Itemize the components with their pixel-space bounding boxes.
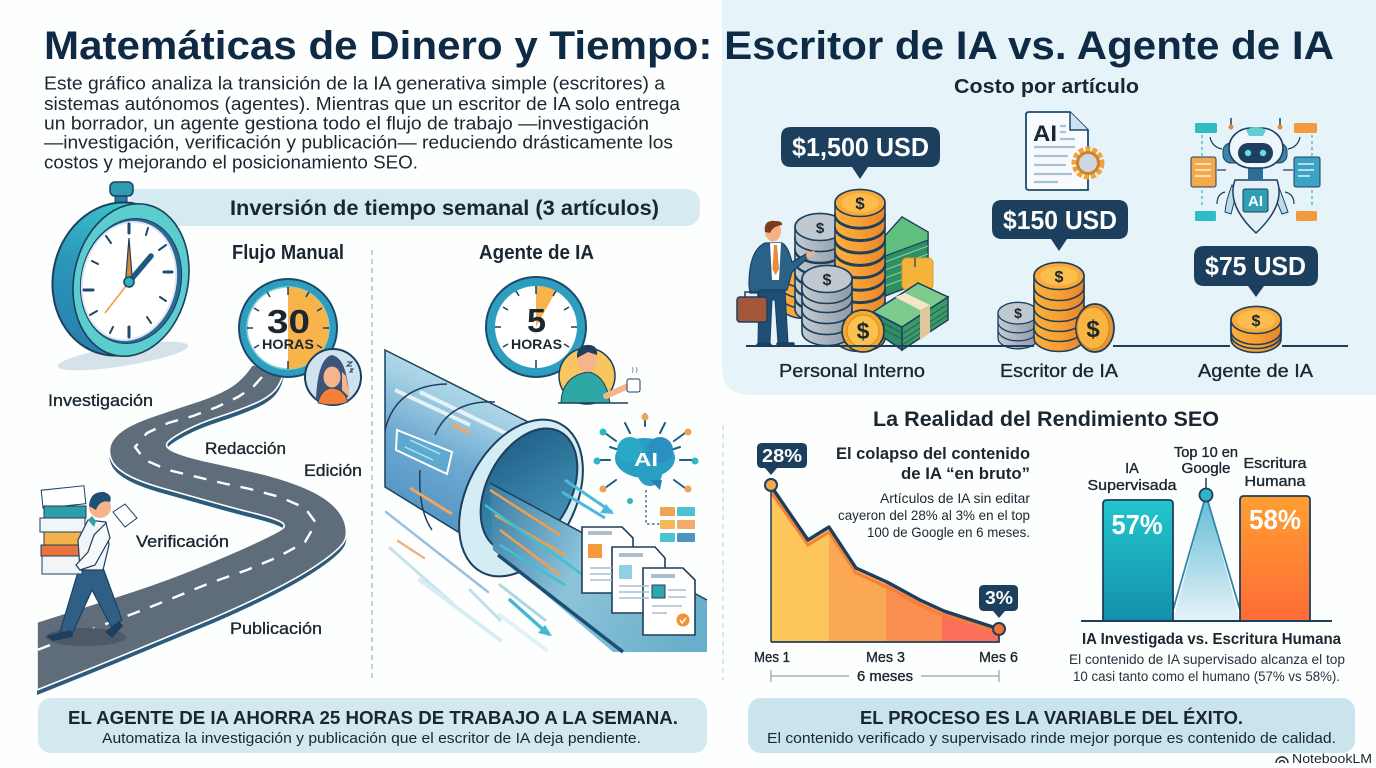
ramp: [490, 483, 707, 652]
bar labels: [1088, 445, 1308, 494]
bubble: 3%: [979, 585, 1018, 618]
speed lines: [386, 512, 548, 650]
intro text block: Este gráfico analiza la transición de la IA generativa simple (escritores) a: [44, 74, 666, 94]
cost labels: Agente de IA: [1198, 360, 1314, 381]
icon: background money pile: $: [857, 318, 870, 344]
icon: agent coin stack: $: [1252, 313, 1261, 330]
tube body: [385, 350, 570, 570]
text: raw AI collapse: 100 de Google en 6 meses.: [867, 524, 1030, 540]
bubble: 75 USD: $75 USD: [1205, 251, 1306, 281]
icon: AI brain: AI: [634, 450, 658, 470]
area chart: raw AI collapse: [765, 479, 1005, 642]
icon: background money pile: $: [855, 194, 865, 213]
time section heading: [130, 189, 700, 226]
bubble: 1500 USD: $1,500 USD: [792, 132, 929, 162]
icon: agent coin stack: [1231, 306, 1281, 352]
bubble: 150 USD: [992, 200, 1128, 251]
icon: writer coin stack: $: [1055, 269, 1064, 286]
big coin: [842, 310, 884, 352]
bar labels: Humana: [1244, 474, 1307, 490]
icon: writer coin stack: [998, 262, 1114, 352]
banner: agent saves 25 hours: [38, 698, 707, 753]
area bands: [771, 486, 829, 642]
icon: AI document: [1026, 112, 1101, 190]
icon: relaxed man with coffee: [558, 345, 640, 404]
bar chart: supervised vs human: 58%: [1249, 504, 1301, 535]
icon: AI brain: [594, 414, 698, 542]
chart axis labels: Mes 3: [866, 650, 905, 666]
heading: AI agent: Agente de IA: [479, 242, 594, 264]
icon: man carrying books: [40, 486, 137, 646]
banner: agent saves 25 hours: EL AGENTE DE IA AHORRA 25 HORAS DE TRABAJO A LA SEMANA.: [68, 707, 678, 728]
road illustration: [37, 365, 346, 695]
road step labels: Investigación: [48, 391, 153, 410]
intro text block: un borrador, un agente gestiona todo el flujo de trabajo —investigación: [44, 114, 649, 134]
icon: AI document: AI: [1033, 121, 1057, 146]
front gray stack: [802, 308, 852, 346]
icon: background money pile: $: [816, 220, 825, 237]
tunnel ring: [434, 398, 608, 598]
road step labels: Redacción: [205, 439, 286, 458]
bar labels: Google: [1182, 461, 1230, 477]
bar labels: Top 10 en: [1174, 445, 1238, 461]
cost labels: [779, 360, 1314, 381]
bubble: 150 USD: $150 USD: [1003, 205, 1117, 235]
bar: AI supervised: [1103, 500, 1173, 621]
text: supervised vs human: IA Investigada vs. Escritura Humana: [1082, 631, 1341, 648]
bar chart: supervised vs human: [1081, 478, 1332, 621]
title: Matemáticas de Dinero y Tiempo: Escritor de IA vs. Agente de IA: [44, 24, 1334, 68]
text: raw AI collapse: de IA “en bruto”: [901, 465, 1030, 483]
bubble: 28%: [757, 443, 807, 475]
text: raw AI collapse: cayeron del 28% al 3% en el top: [838, 507, 1030, 523]
banner: process is the variable: EL PROCESO ES LA VARIABLE DEL ÉXITO.: [860, 707, 1243, 728]
bar labels: IA: [1125, 461, 1139, 477]
bubble: 28%: 28%: [762, 446, 802, 466]
intro text block: [44, 74, 681, 172]
banner: process is the variable: [748, 698, 1355, 753]
icon: writer coin stack: $: [1014, 305, 1022, 321]
chart axis labels: [754, 650, 1018, 685]
clock: 30 hours: 30: [267, 303, 310, 340]
front cash: [873, 312, 902, 350]
bar labels: Supervisada: [1088, 478, 1178, 494]
cost labels: Personal Interno: [779, 360, 925, 381]
beam: [1173, 495, 1240, 621]
bubble: 3%: 3%: [985, 588, 1013, 608]
road step labels: Publicación: [230, 619, 322, 638]
icon: background money pile: [780, 190, 948, 352]
panel: cost background: [722, 0, 1376, 395]
chart axis labels: 6 meses: [857, 669, 913, 685]
icon: robot agent: [1191, 118, 1320, 233]
icon: large stopwatch: [38, 182, 203, 376]
intro text block: —investigación, verificación y publicación— reduciendo drásticamente los: [44, 132, 673, 152]
heading: manual flow: Flujo Manual: [232, 242, 344, 264]
banner: process is the variable: El contenido verificado y supervisado rinde mejor porque es contenido de calidad.: [767, 731, 1336, 747]
baseline: [746, 345, 1348, 347]
icon: robot agent: AI: [1248, 193, 1263, 210]
chart axis labels: Mes 6: [979, 650, 1018, 666]
illustration: AI pipeline tunnel: [385, 350, 707, 652]
clock: 30 hours: HORAS: [262, 336, 314, 352]
bubble: 75 USD: [1194, 246, 1318, 297]
icon: businessman: [737, 220, 815, 345]
heading: SEO reality: La Realidad del Rendimiento SEO: [873, 408, 1219, 431]
clock: 5 hours: 5: [527, 302, 546, 339]
bar chart: supervised vs human: 57%: [1112, 509, 1163, 540]
icon: tired woman badge: [305, 349, 361, 405]
text: raw AI collapse: [836, 445, 1030, 540]
icon: writer coin stack: $: [1086, 316, 1100, 343]
text: raw AI collapse: El colapso del contenido: [836, 445, 1030, 463]
watermark: NotebookLM: NotebookLM: [1292, 751, 1372, 766]
tall orange stack: [835, 314, 885, 352]
icon: published documents: [582, 527, 695, 635]
back coins: [780, 280, 830, 318]
text: raw AI collapse: Artículos de IA sin editar: [880, 490, 1030, 506]
intro text block: sistemas autónomos (agentes). Mientras que un escritor de IA solo entrega: [44, 94, 681, 114]
banner: agent saves 25 hours: Automatiza la investigación y publicación que el escritor de IA deja pendiente.: [102, 730, 641, 747]
text: supervised vs human: El contenido de IA supervisado alcanza el top: [1069, 652, 1345, 667]
clock: 5 hours: [486, 277, 586, 377]
clock: 30 hours: [239, 279, 337, 377]
time section heading: Inversión de tiempo semanal (3 artículos): [230, 197, 659, 220]
road step labels: Edición: [304, 461, 362, 480]
bar labels: Escritura: [1244, 456, 1308, 472]
text: supervised vs human: 10 casi tanto como el humano (57% vs 58%).: [1073, 669, 1340, 684]
road step labels: [48, 391, 362, 638]
bar: human: [1240, 496, 1310, 621]
intro text block: costos y mejorando el posicionamiento SEO.: [44, 152, 418, 172]
text: supervised vs human: [1069, 631, 1345, 684]
icon: background money pile: $: [823, 272, 832, 289]
cost labels: Escritor de IA: [1000, 360, 1119, 381]
chart axis labels: Mes 1: [754, 650, 790, 666]
heading: cost per article: Costo por artículo: [954, 76, 1139, 98]
cash: [885, 217, 928, 296]
clock: 5 hours: HORAS: [511, 336, 562, 352]
bubble: 1500 USD: [781, 127, 940, 179]
road step labels: Verificación: [136, 532, 229, 551]
